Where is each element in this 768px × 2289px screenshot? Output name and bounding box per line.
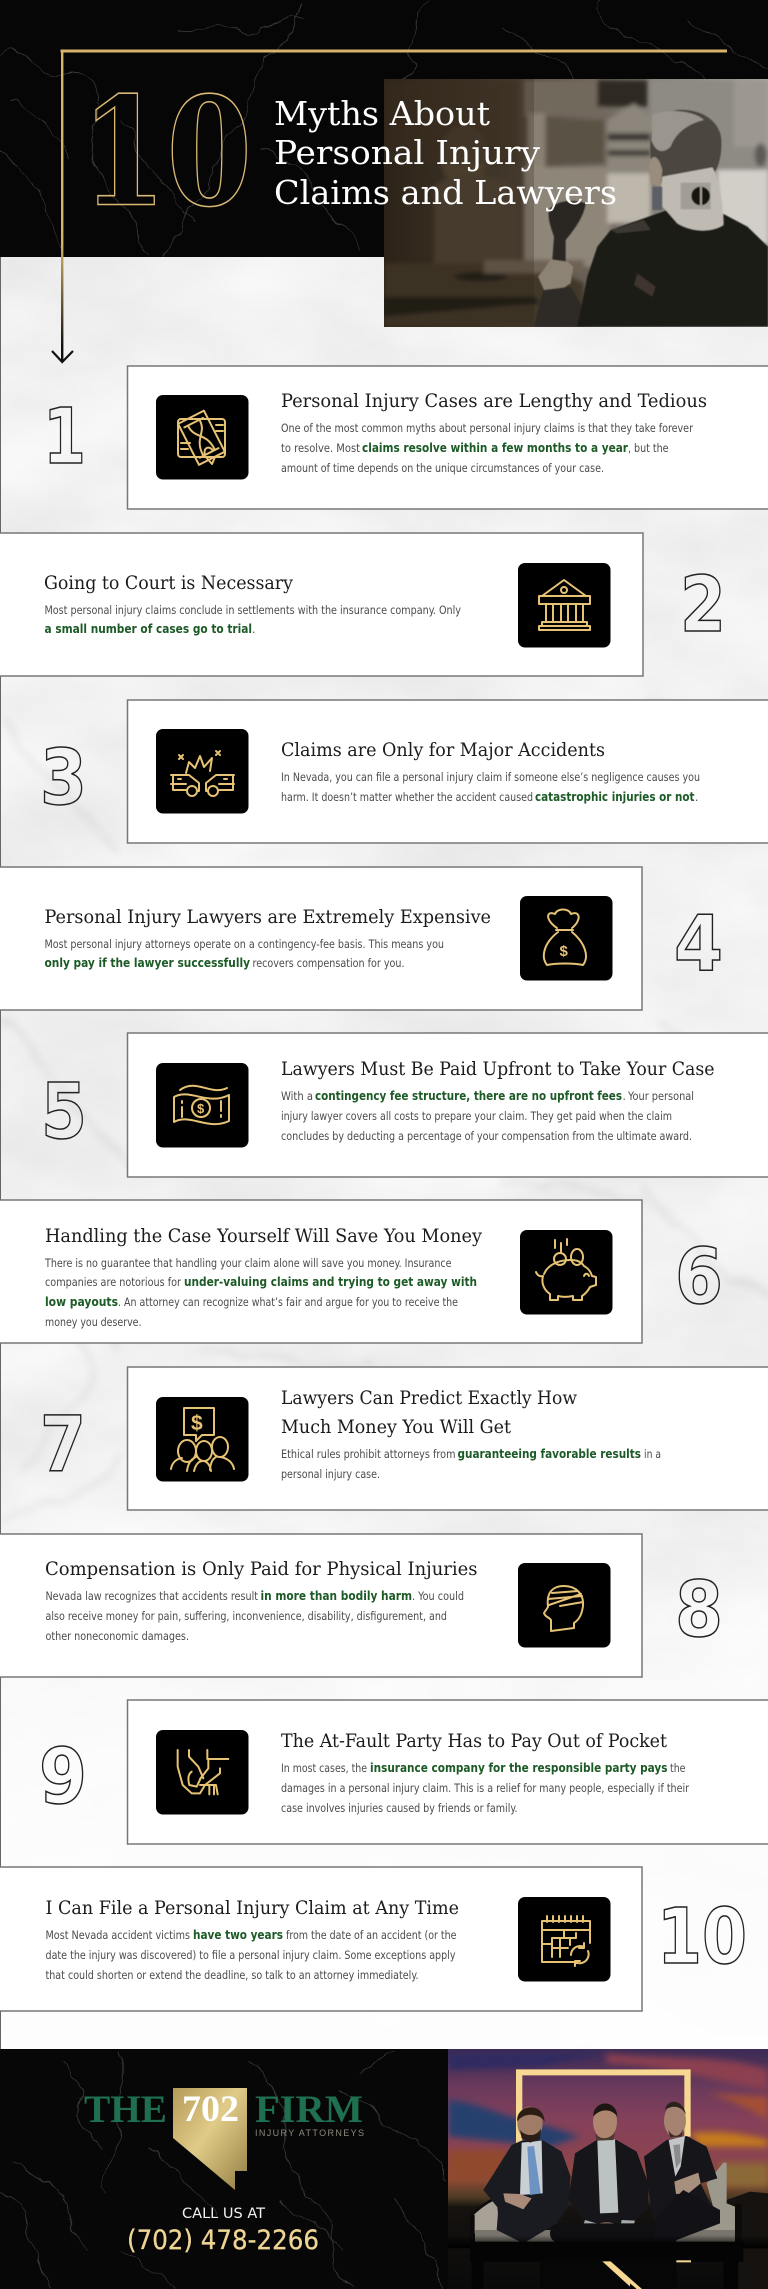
heading: Handling the Case Yourself Will Save You Money	[45, 1226, 483, 1247]
body text: .	[695, 790, 698, 804]
logo: The 702 Firm	[84, 2088, 364, 2190]
title: Personal Injury	[274, 133, 540, 172]
body text: In Nevada, you can file a personal injury claim if someone else’s negligence causes you	[281, 770, 700, 784]
body text: Most Nevada accident victims	[46, 1928, 190, 1942]
body text	[46, 1928, 456, 1982]
right man	[644, 2136, 717, 2230]
heading	[281, 1388, 578, 1438]
body text: claims resolve within a few months to a year	[362, 441, 629, 455]
panel: myth 4	[0, 867, 723, 1010]
body text	[44, 937, 444, 970]
crutch	[549, 201, 586, 263]
body text: under-valuing claims and trying to get away with	[184, 1275, 477, 1289]
panel: myth 1	[43, 366, 768, 509]
center man	[568, 2140, 648, 2224]
number 2: 2	[680, 561, 726, 650]
icon: calendar	[518, 1897, 610, 1982]
heading: Much Money You Will Get	[281, 1417, 511, 1438]
footer photo: three attorneys	[440, 2049, 768, 2289]
body text: low payouts	[45, 1295, 118, 1309]
body text: contingency fee structure, there are no upfront fees	[315, 1089, 622, 1103]
body text	[281, 1761, 690, 1815]
body text: .	[252, 622, 255, 636]
icon: banknote: $	[197, 1101, 205, 1116]
body text	[44, 603, 461, 636]
body text: damages in a personal injury claim. This is a relief for many people, especially if their	[281, 1781, 690, 1795]
body text: in more than bodily harm	[260, 1589, 412, 1603]
icon: people with money bubble: $	[191, 1412, 203, 1435]
icon: banknote	[156, 1063, 248, 1148]
header photo: man in neck brace	[384, 79, 768, 327]
heading: Compensation is Only Paid for Physical Injuries	[45, 1559, 478, 1580]
body text: insurance company for the responsible party pays	[370, 1761, 668, 1775]
heading: The At-Fault Party Has to Pay Out of Pocket	[281, 1731, 667, 1752]
heading: Lawyers Can Predict Exactly How	[281, 1388, 578, 1409]
body text: catastrophic injuries or not	[535, 790, 694, 804]
body text: money you deserve.	[45, 1315, 142, 1329]
icon: courthouse	[518, 563, 610, 648]
body text: personal injury case.	[281, 1467, 380, 1481]
number 9: 9	[39, 1733, 87, 1822]
body text: that could shorten or extend the deadline, so talk to an attorney immediately.	[46, 1968, 418, 1982]
number 1: 1	[43, 393, 86, 482]
heading: I Can File a Personal Injury Claim at Any Time	[46, 1898, 459, 1919]
heading: Going to Court is Necessary	[44, 573, 294, 594]
icon: money bag	[520, 896, 612, 980]
title: Myths About	[274, 94, 490, 133]
body text: .	[622, 1089, 626, 1103]
icon: bandaged head	[518, 1563, 610, 1648]
body text: have two years	[193, 1928, 283, 1942]
body text	[281, 770, 700, 804]
logo: The 702 Firm: FIRM	[255, 2088, 363, 2131]
number 8: 8	[675, 1566, 723, 1655]
body text: Nevada law recognizes that accidents result	[46, 1589, 258, 1603]
icon: piggy bank	[520, 1230, 612, 1314]
icon: hand holding injured leg	[156, 1730, 248, 1814]
number 10: 10	[657, 1893, 747, 1982]
gold frame	[516, 2069, 691, 2143]
panel: myth 2	[0, 533, 726, 676]
body text: to resolve. Most	[281, 441, 360, 455]
number 4: 4	[674, 900, 723, 989]
icon: car crash	[156, 729, 248, 814]
body text: guaranteeing favorable results	[458, 1447, 641, 1461]
body text	[44, 1256, 477, 1329]
body text: only pay if the lawyer successfully	[44, 956, 250, 970]
logo: The 702 Firm: THE	[84, 2088, 167, 2131]
body text	[281, 1089, 694, 1143]
panel: myth 6	[0, 1200, 723, 1343]
body text: companies are notorious for	[45, 1275, 182, 1289]
body text: injury lawyer covers all costs to prepare your claim. They get paid when the claim	[281, 1109, 672, 1123]
title	[274, 94, 617, 212]
body text: Your personal	[627, 1089, 694, 1103]
heading: Claims are Only for Major Accidents	[281, 740, 605, 761]
body text: case involves injuries caused by friends or family.	[281, 1801, 518, 1815]
body text: In most cases, the	[281, 1761, 367, 1775]
body text: Most personal injury attorneys operate on a contingency-fee basis. This means you	[44, 937, 444, 951]
logo: The 702 Firm: 702	[182, 2089, 239, 2130]
number 6: 6	[675, 1233, 723, 1322]
footer: black marble panel	[0, 2049, 448, 2289]
panel: myth 10	[0, 1867, 747, 2011]
body text	[46, 1589, 464, 1643]
body text: . An attorney can recognize what’s fair and argue for you to receive the	[118, 1295, 458, 1309]
body text: There is no guarantee that handling your claim alone will save you money. Insurance	[44, 1256, 452, 1270]
heading: Lawyers Must Be Paid Upfront to Take Your Case	[281, 1059, 715, 1080]
body text: , but the	[628, 441, 668, 455]
call to action	[127, 2206, 319, 2256]
body text: . You could	[412, 1589, 464, 1603]
body text: Ethical rules prohibit attorneys from	[281, 1447, 456, 1461]
jacket	[577, 210, 768, 327]
number 7: 7	[40, 1401, 86, 1490]
body text: recovers compensation for you.	[252, 956, 404, 970]
panel: myth 3	[40, 700, 768, 843]
body text: amount of time depends on the unique circumstances of your case.	[281, 461, 604, 475]
icon: Nevada state shape	[173, 2088, 247, 2190]
neck and head	[650, 110, 721, 183]
body text	[281, 421, 694, 475]
body text: also receive money for pain, suffering, inconvenience, disability, disfigurement, and	[46, 1609, 447, 1623]
panel: myth 5	[41, 1033, 768, 1177]
icon: hourglass on document	[156, 395, 248, 480]
number 3: 3	[40, 734, 87, 823]
body text: With a	[281, 1089, 313, 1103]
body text: a small number of cases go to trial	[44, 622, 252, 636]
title: Claims and Lawyers	[274, 173, 617, 212]
body text: in a	[644, 1447, 661, 1461]
heading: Personal Injury Lawyers are Extremely Expensive	[44, 907, 491, 928]
header black marble band	[0, 0, 768, 257]
body text: concludes by deducting a percentage of your compensation from the ultimate award.	[281, 1129, 692, 1143]
left man	[483, 2141, 571, 2243]
body text	[281, 1447, 661, 1481]
number 5: 5	[41, 1068, 87, 1157]
call to action: CALL US AT	[182, 2206, 265, 2222]
icon: money bag: $	[560, 943, 568, 960]
sofa	[474, 2201, 498, 2234]
panel: myth 8	[0, 1534, 723, 1677]
panel: myth 7	[40, 1367, 768, 1510]
big outlined number 10: 10	[81, 64, 252, 240]
collar	[659, 167, 723, 230]
body text: harm. It doesn’t matter whether the accident caused	[281, 790, 533, 804]
body text: the	[670, 1761, 686, 1775]
body text: Most personal injury claims conclude in settlements with the insurance company. Only	[44, 603, 461, 617]
arrow: gold line leading to the list	[52, 50, 727, 362]
body text: other noneconomic damages.	[46, 1629, 189, 1643]
body text: from the date of an accident (or the	[286, 1928, 456, 1942]
body text: date the injury was discovered) to file a personal injury claim. Some exceptions apply	[46, 1948, 456, 1962]
icon: people with money bubble	[156, 1397, 248, 1482]
logo: The 702 Firm: INJURY ATTORNEYS	[255, 2128, 364, 2138]
body text: One of the most common myths about personal injury claims is that they take forever	[281, 421, 694, 435]
heading: Personal Injury Cases are Lengthy and Tedious	[281, 391, 707, 412]
white marble background	[0, 257, 768, 2049]
call to action: (702) 478-2266	[127, 2225, 319, 2256]
panel: myth 9	[39, 1700, 768, 1844]
